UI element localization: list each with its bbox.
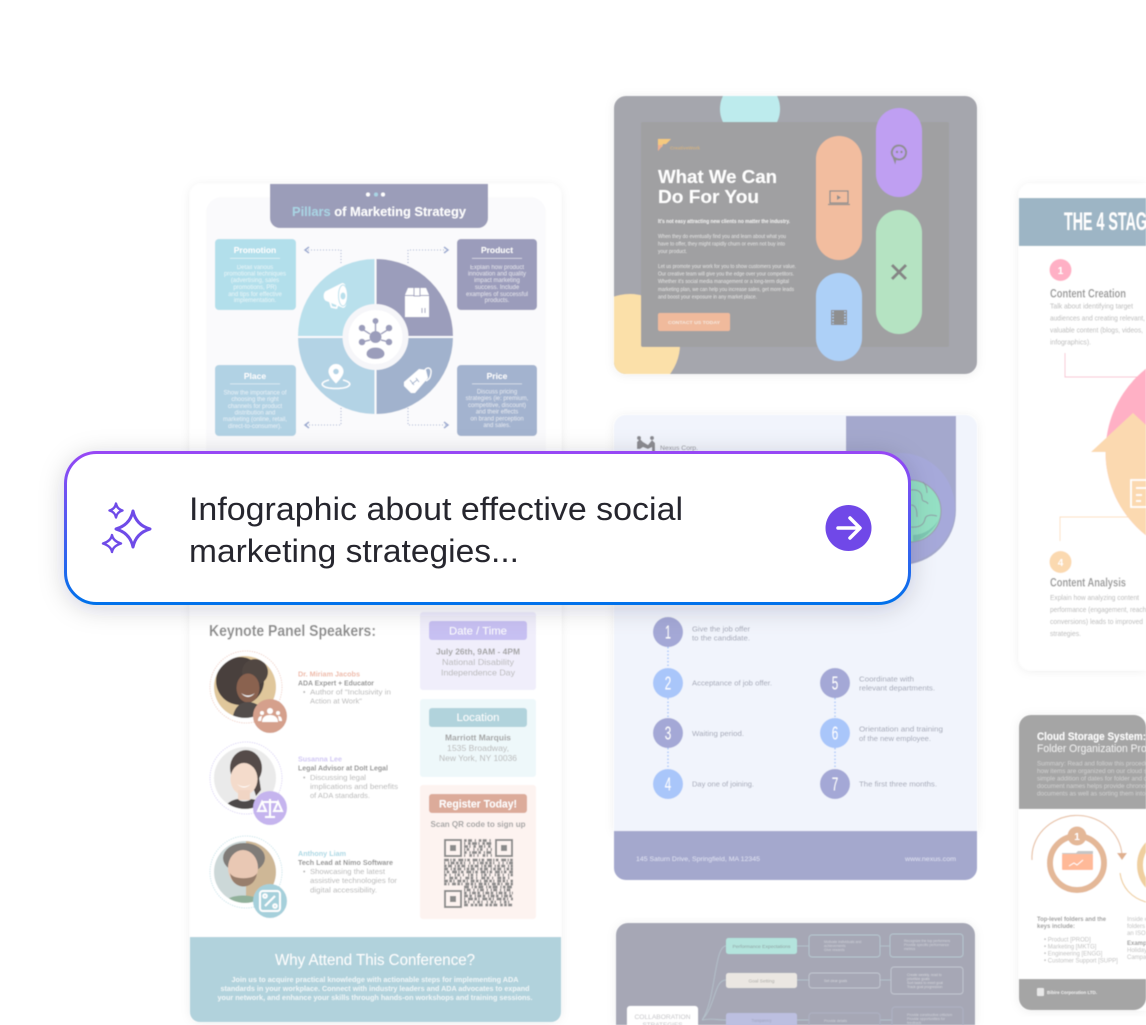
promotion box: promotions, PR) xyxy=(233,285,277,291)
node: performance expectations: metrics xyxy=(904,947,916,951)
stage 1 text xyxy=(1050,259,1145,346)
step 4: 4 xyxy=(665,774,671,794)
price box: on brand perception xyxy=(470,416,524,422)
body text: It's not easy attracting new clients no matter the industry. xyxy=(658,219,791,225)
place box: direct-to-consumer). xyxy=(228,424,282,430)
speaker 2: Legal Advisor at DoIt Legal xyxy=(298,766,388,772)
panel: location: New York, NY 10036 xyxy=(439,753,517,763)
panel: location: Marriott Marquis xyxy=(445,732,511,742)
pillars donut chart xyxy=(298,259,453,414)
step 6: of the new employee. xyxy=(859,736,931,743)
step 7 xyxy=(820,769,937,799)
product box: Explain how product xyxy=(470,265,524,271)
product box: innovation and quality xyxy=(468,272,526,278)
step 5: relevant departments. xyxy=(859,686,935,692)
place box xyxy=(215,365,296,436)
price box: strategies (ie: premium, xyxy=(466,396,529,402)
QR code xyxy=(444,840,513,907)
speaker 3: Showcasing the latest xyxy=(310,869,385,876)
step 3 xyxy=(653,718,744,748)
icon: price tag xyxy=(404,368,431,393)
step 7: 7 xyxy=(832,774,838,794)
step 1 ring with folder xyxy=(1032,815,1127,890)
footer band: www.nexus.com xyxy=(904,856,956,863)
node: performance expectations: Motivate individuals and xyxy=(824,940,861,944)
speaker 1: Dr. Miriam Jacobs xyxy=(298,672,360,678)
node: goal setting: Sort tasks to meet goal xyxy=(907,981,943,985)
prompt text xyxy=(189,491,683,569)
step 2 ring partial xyxy=(1120,834,1146,902)
stage 4 text: 4 xyxy=(1058,558,1064,569)
folder notes: • Customer Support [SUPP] xyxy=(1044,958,1118,964)
speaker 2: of ADA standards. xyxy=(310,793,370,800)
stage 4 text xyxy=(1050,551,1146,638)
icon: brain globe xyxy=(879,480,941,542)
card: collaboration strategies mind map xyxy=(616,923,975,1025)
node: goal setting: prioritize goals xyxy=(907,977,930,981)
footer band: why attend this conference: Join us to acquire practical knowledge with actionable steps for implementing ADA xyxy=(232,975,519,984)
step 7: The first three months. xyxy=(859,782,937,788)
footer band: Bibire Corporation LTD. xyxy=(1047,990,1097,996)
node: performance expectations: Performance Expectations xyxy=(732,944,791,950)
pillars header: Pillars of Marketing Strategy xyxy=(292,204,467,219)
title: Do For You xyxy=(658,186,759,207)
icon: network person xyxy=(359,318,392,358)
speaker 3: • xyxy=(303,869,306,876)
contact button: CONTACT US TODAY xyxy=(668,320,721,326)
center node xyxy=(627,1006,698,1025)
price box xyxy=(457,365,537,436)
panel: date and time: July 26th, 9AM - 4PM xyxy=(436,646,520,656)
footer band: why attend this conference: Why Attend This Conference? xyxy=(275,952,475,969)
speaker 1: Author of "Inclusivity in xyxy=(310,690,391,696)
panel: register with QR code xyxy=(420,785,536,919)
speaker 2 xyxy=(210,742,399,825)
header band xyxy=(1019,198,1146,246)
body text: Our creative team will give you the edge over your competitors. xyxy=(658,272,794,278)
speaker 3: assistive technologies for xyxy=(310,878,398,885)
panel: location: 1535 Broadway, xyxy=(447,743,509,753)
promotion box: implementation. xyxy=(234,298,277,304)
body text: your product. xyxy=(658,249,687,255)
panel: date and time: Independence Day xyxy=(441,668,516,678)
connector lines xyxy=(702,946,892,1020)
footer band: why attend this conference: standards in your workplace. Connect with industry leaders and ADA advocates to expand xyxy=(220,984,530,993)
purple pill with speech bubble xyxy=(876,108,922,197)
place box: Show the importance of xyxy=(223,390,287,396)
step 5: Coordinate with xyxy=(859,676,914,684)
step 6: 6 xyxy=(832,724,838,744)
blue pill with film icon xyxy=(816,273,862,361)
stage 1 text: Talk about identifying target xyxy=(1050,302,1134,310)
body text: have to offer, they might rapidly churn or even not buy into xyxy=(658,242,785,248)
node: goal setting: Goal Setting xyxy=(748,978,775,984)
speaker 2: • xyxy=(303,775,306,782)
step 5 xyxy=(820,668,935,698)
footer band: why attend this conference xyxy=(190,937,561,1022)
icon: sparkles xyxy=(103,504,150,552)
step 1 xyxy=(653,617,751,647)
stage 1 text: Content Creation xyxy=(1050,288,1126,300)
node: transparency xyxy=(726,1007,963,1025)
step 3: Waiting period. xyxy=(692,731,744,738)
step 1: 1 xyxy=(665,622,671,642)
green pill with tools icon xyxy=(876,210,922,334)
step 4 xyxy=(653,769,754,799)
center node: COLLABORATION xyxy=(634,1014,691,1021)
speaker 3: digital accessibility. xyxy=(310,888,377,894)
product box: success. Include xyxy=(475,285,520,291)
panel: register with QR code: Register Today! xyxy=(439,798,517,810)
footer band xyxy=(614,831,977,880)
icon: people xyxy=(258,715,282,722)
body text: marketing plan, we can help you increase sales, get more leads xyxy=(658,287,794,293)
node: transparency: Transparency xyxy=(752,1018,772,1024)
folder notes: folders xyxy=(1127,924,1145,930)
panel: register with QR code: Scan QR code to sign up xyxy=(430,819,526,829)
card: the 4 stages xyxy=(1019,184,1146,670)
product box: impact marketing xyxy=(474,278,520,284)
product box: examples of successful xyxy=(466,292,528,298)
speaker 2: Susanna Lee xyxy=(298,756,342,764)
panel: date and time: National Disability xyxy=(442,657,515,667)
node: goal setting: Track goal progression xyxy=(907,985,943,989)
node: transparency: Provide opportunities for xyxy=(907,1017,946,1021)
speaker 3 xyxy=(210,836,398,918)
card: what we can do for you xyxy=(613,95,978,376)
contact button xyxy=(658,313,730,331)
step 1: Give the job offer xyxy=(692,626,751,634)
speaker 1: ADA Expert + Educator xyxy=(298,680,374,688)
product box: products. xyxy=(485,298,510,304)
step 3: 3 xyxy=(665,724,671,744)
promotion box: Promotion xyxy=(234,245,276,255)
stage 1 text: infographics). xyxy=(1050,338,1091,346)
stage 1 text: 1 xyxy=(1058,266,1064,277)
price box: Discuss pricing xyxy=(477,390,517,396)
step 5: 5 xyxy=(832,674,838,694)
place box: choosing the right xyxy=(231,397,279,403)
icon: scales xyxy=(258,799,282,817)
footer band: why attend this conference: your network, and enhance your skills through hands-on workshops and training sessions. xyxy=(218,993,532,1002)
folder notes: Top-level folders and the xyxy=(1037,917,1107,923)
speaker 1 xyxy=(210,651,391,733)
footer band: 145 Saturn Drive, Springfield, MA 12345 xyxy=(636,856,760,863)
step 2 xyxy=(653,668,772,698)
folder notes: keys include: xyxy=(1037,924,1075,930)
card: cloud storage system xyxy=(1019,715,1146,1010)
card: onboarding steps xyxy=(614,415,977,880)
body text: When they do eventually find you and learn about what you xyxy=(658,234,786,240)
place box: Place xyxy=(244,371,266,381)
pillars header xyxy=(270,184,488,228)
step 4: Day one of joining. xyxy=(692,782,754,788)
logo: nexus corp: Nexus Corp. xyxy=(660,445,698,452)
product box xyxy=(457,239,537,310)
body text xyxy=(658,219,796,300)
step 2: 2 xyxy=(665,674,671,694)
speaker 2: implications and benefits xyxy=(310,784,399,791)
promotion box xyxy=(215,239,296,310)
place box: distribution and xyxy=(235,410,275,416)
node: performance expectations: Recognize the top performers xyxy=(904,939,950,943)
stage 4 text: Content Analysis xyxy=(1050,578,1126,590)
price box: and their effects xyxy=(476,410,518,416)
card: pillars of marketing strategy and conference poster xyxy=(190,184,561,1022)
folder notes: • Engineering [ENGG] xyxy=(1044,952,1103,958)
panel: date and time xyxy=(420,612,536,690)
promotion box: Detail various xyxy=(237,265,273,271)
node: transparency: Provide constructive criticism xyxy=(907,1013,952,1017)
section heading: keynote panel speakers: Keynote Panel Speakers: xyxy=(209,623,376,640)
prompt text: Infographic about effective social xyxy=(189,491,683,527)
promotion box: promotional techniques xyxy=(224,272,286,278)
title: What We Can xyxy=(658,166,777,187)
step 6 xyxy=(820,718,943,748)
logo: CreativeWork xyxy=(670,146,700,152)
stage diagram xyxy=(1060,346,1146,558)
body text: and boost your exposure in any market place. xyxy=(658,294,757,300)
step 2: Acceptance of job offer. xyxy=(692,680,772,688)
node: performance expectations: Give rewards xyxy=(824,948,845,952)
product box: Product xyxy=(481,245,513,255)
orange pill with laptop xyxy=(816,136,862,260)
promotion box: and tips for effective xyxy=(228,292,282,298)
node: performance expectations: Provide specific performance xyxy=(904,943,949,947)
step 6: Orientation and training xyxy=(859,726,943,734)
price box: and sales. xyxy=(483,423,511,429)
title xyxy=(658,166,777,207)
folder notes: • Product [PROD] xyxy=(1044,938,1091,944)
prompt search box xyxy=(66,452,910,604)
node: transparency: Provide details xyxy=(824,1019,847,1023)
promotion box: (advertising, sales xyxy=(231,278,279,284)
place box: marketing (online, retail, xyxy=(223,417,287,423)
step 1 ring with folder: 1 xyxy=(1074,832,1080,843)
price box: competitive, discount) xyxy=(468,403,526,409)
node: goal setting xyxy=(726,967,963,994)
speaker 2: Discussing legal xyxy=(310,775,366,782)
node: transparency: feedback xyxy=(907,1021,921,1025)
icon: tools xyxy=(260,891,280,911)
node: performance expectations xyxy=(726,934,963,957)
body text: Whether it's social media management or a long-term digital xyxy=(658,279,789,285)
price box: Price xyxy=(487,371,508,381)
speaker 1: • xyxy=(303,690,306,696)
header band xyxy=(1019,715,1146,809)
panel: location: Location xyxy=(456,712,500,724)
node: goal setting: Create weekly, read to xyxy=(907,973,942,977)
purple tab xyxy=(846,416,956,565)
place box: channels for product xyxy=(228,404,283,410)
stage 4 text: strategies. xyxy=(1050,629,1081,638)
icon: box xyxy=(405,288,429,317)
speaker 1: Action at Work" xyxy=(310,698,363,706)
prompt text: marketing strategies... xyxy=(189,533,519,569)
speaker 3: Anthony Liam xyxy=(298,851,346,858)
folder notes xyxy=(1037,917,1146,964)
icon: arrow button xyxy=(826,505,872,551)
speaker 3: Tech Lead at Nimo Software xyxy=(298,860,393,867)
panel: location xyxy=(420,699,536,777)
node: performance expectations: achievements xyxy=(824,944,846,948)
step 1: to the candidate. xyxy=(692,636,750,642)
folder notes: • Marketing [MKTG] xyxy=(1044,944,1097,950)
icon: map pin xyxy=(322,364,350,388)
step connectors xyxy=(668,647,835,769)
logo xyxy=(658,139,700,152)
panel: date and time: Date / Time xyxy=(449,626,507,638)
node: goal setting: Set clear goals xyxy=(824,979,847,983)
dotted arrows xyxy=(305,247,448,428)
body text: Let us promote your work for you to show customers your value. xyxy=(658,264,796,270)
footer band xyxy=(1019,979,1146,1010)
logo: nexus corp xyxy=(637,436,698,452)
icon: megaphone xyxy=(324,284,348,308)
